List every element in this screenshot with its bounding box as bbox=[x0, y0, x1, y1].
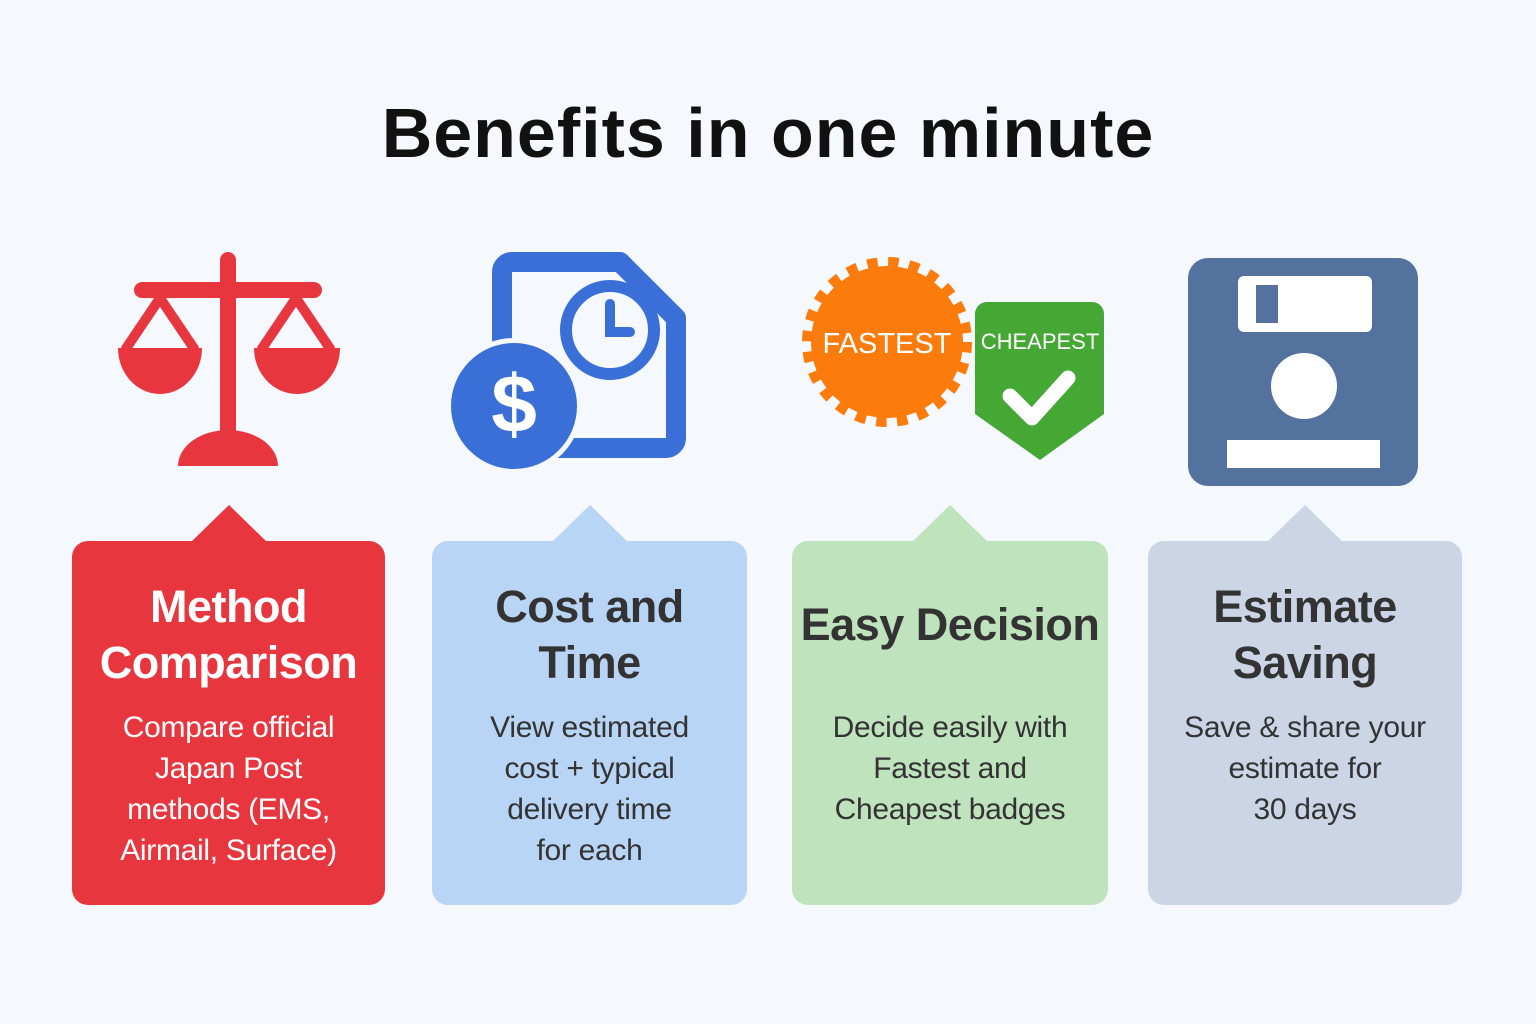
text: method comparison: methods (EMS, bbox=[127, 793, 330, 826]
heading: cost and time: Time bbox=[538, 637, 641, 688]
title: Benefits in one minute bbox=[382, 94, 1154, 172]
heading: estimate saving bbox=[1213, 581, 1397, 688]
icon: cheapest badge bbox=[975, 302, 1104, 460]
text: method comparison: Japan Post bbox=[155, 752, 302, 785]
text: easy decision: Fastest and bbox=[873, 752, 1027, 785]
icon: fastest badge bbox=[807, 262, 967, 422]
icon: cheapest badge: CHEAPEST bbox=[981, 329, 1099, 354]
icon: document, clock and dollar: $ bbox=[491, 359, 537, 450]
text: easy decision: Cheapest badges bbox=[835, 793, 1065, 826]
panel: easy decision bbox=[792, 541, 1108, 905]
text: cost and time: delivery time bbox=[507, 793, 672, 826]
text: estimate saving bbox=[1184, 711, 1426, 826]
panel: method comparison bbox=[72, 541, 385, 905]
text: method comparison bbox=[120, 711, 337, 867]
text: estimate saving: estimate for bbox=[1228, 752, 1382, 785]
heading: estimate saving: Estimate bbox=[1213, 581, 1397, 632]
text: cost and time: cost + typical bbox=[504, 752, 675, 785]
heading: estimate saving: Saving bbox=[1233, 637, 1377, 688]
heading: easy decision: Easy Decision bbox=[801, 599, 1099, 650]
heading: cost and time: Cost and bbox=[495, 581, 684, 632]
heading: cost and time bbox=[495, 581, 684, 688]
heading: method comparison bbox=[100, 581, 357, 688]
heading: method comparison: Method bbox=[150, 581, 307, 632]
text: cost and time: View estimated bbox=[490, 711, 689, 744]
text: estimate saving: Save & share your bbox=[1184, 711, 1426, 744]
icon: floppy disk bbox=[1188, 258, 1418, 486]
text: estimate saving: 30 days bbox=[1254, 793, 1356, 826]
icon: fastest badge: FASTEST bbox=[823, 328, 952, 360]
text: cost and time bbox=[490, 711, 689, 867]
text: method comparison: Compare official bbox=[123, 711, 334, 744]
panel: estimate saving bbox=[1148, 541, 1462, 905]
panel: cost and time bbox=[432, 541, 747, 905]
text: easy decision bbox=[833, 711, 1067, 826]
icon: document, clock and dollar bbox=[446, 262, 676, 474]
text: easy decision: Decide easily with bbox=[833, 711, 1067, 744]
text: cost and time: for each bbox=[536, 834, 642, 867]
text: method comparison: Airmail, Surface) bbox=[120, 834, 337, 867]
heading: method comparison: Comparison bbox=[100, 637, 357, 688]
icon: scales bbox=[118, 252, 340, 466]
